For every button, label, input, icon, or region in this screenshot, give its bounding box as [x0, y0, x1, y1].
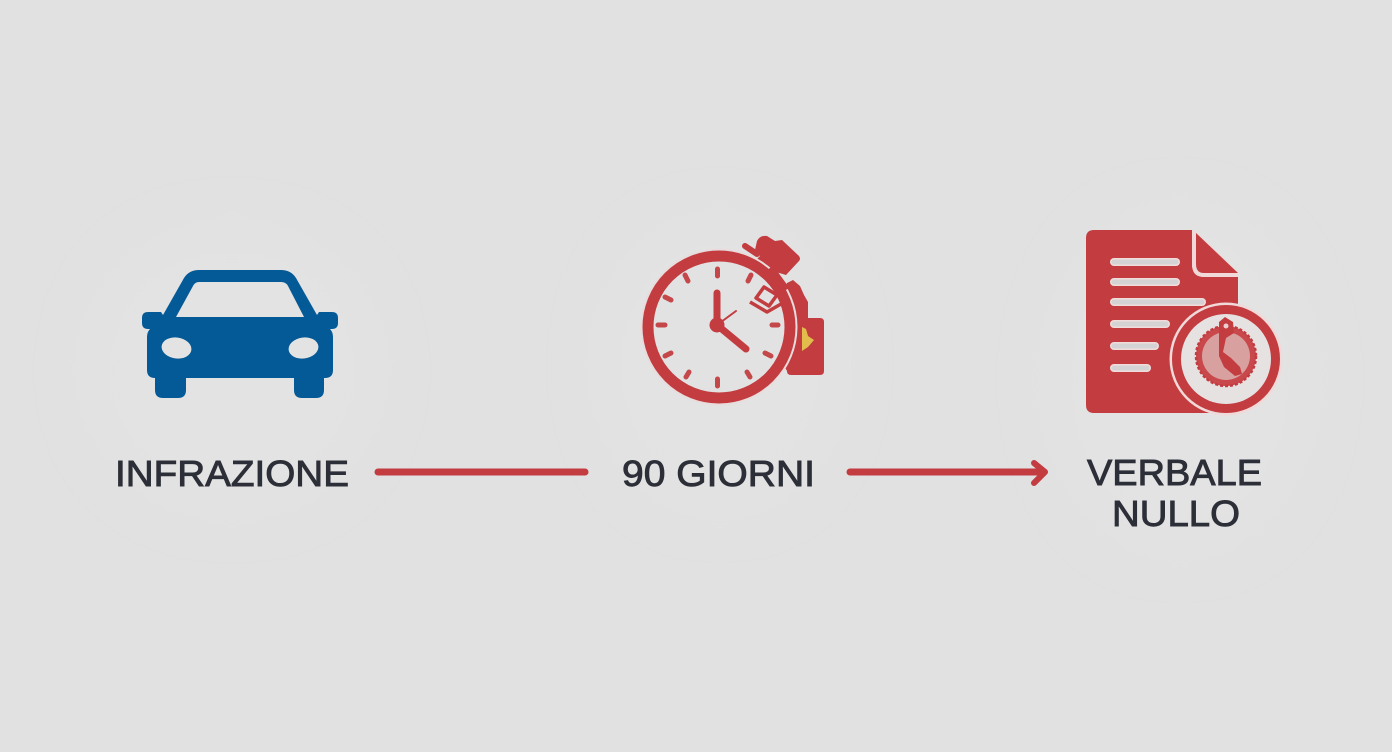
small inner device [750, 287, 781, 312]
label: INFRAZIONE: INFRAZIONE [115, 453, 349, 494]
icon: stopwatch [640, 236, 824, 406]
label: VERBALE NULLO [1087, 452, 1262, 534]
icon: document with seal [1086, 230, 1282, 416]
label: VERBALE NULLO: VERBALE [1087, 452, 1262, 493]
ticks [658, 269, 778, 386]
arrow [850, 463, 1045, 483]
document text lines [1114, 262, 1202, 368]
crown [752, 236, 800, 282]
label: VERBALE NULLO: NULLO [1112, 493, 1240, 534]
icon: car [142, 270, 338, 398]
seal badge [1170, 302, 1282, 416]
yellow mark [802, 327, 814, 351]
crown pin [745, 246, 757, 254]
headlights [160, 336, 193, 360]
connector line [378, 468, 585, 476]
side mechanism and tag [775, 280, 824, 375]
label: 90 GIORNI: 90 GIORNI [622, 453, 815, 494]
dial [640, 248, 798, 406]
clock hands [717, 293, 746, 349]
